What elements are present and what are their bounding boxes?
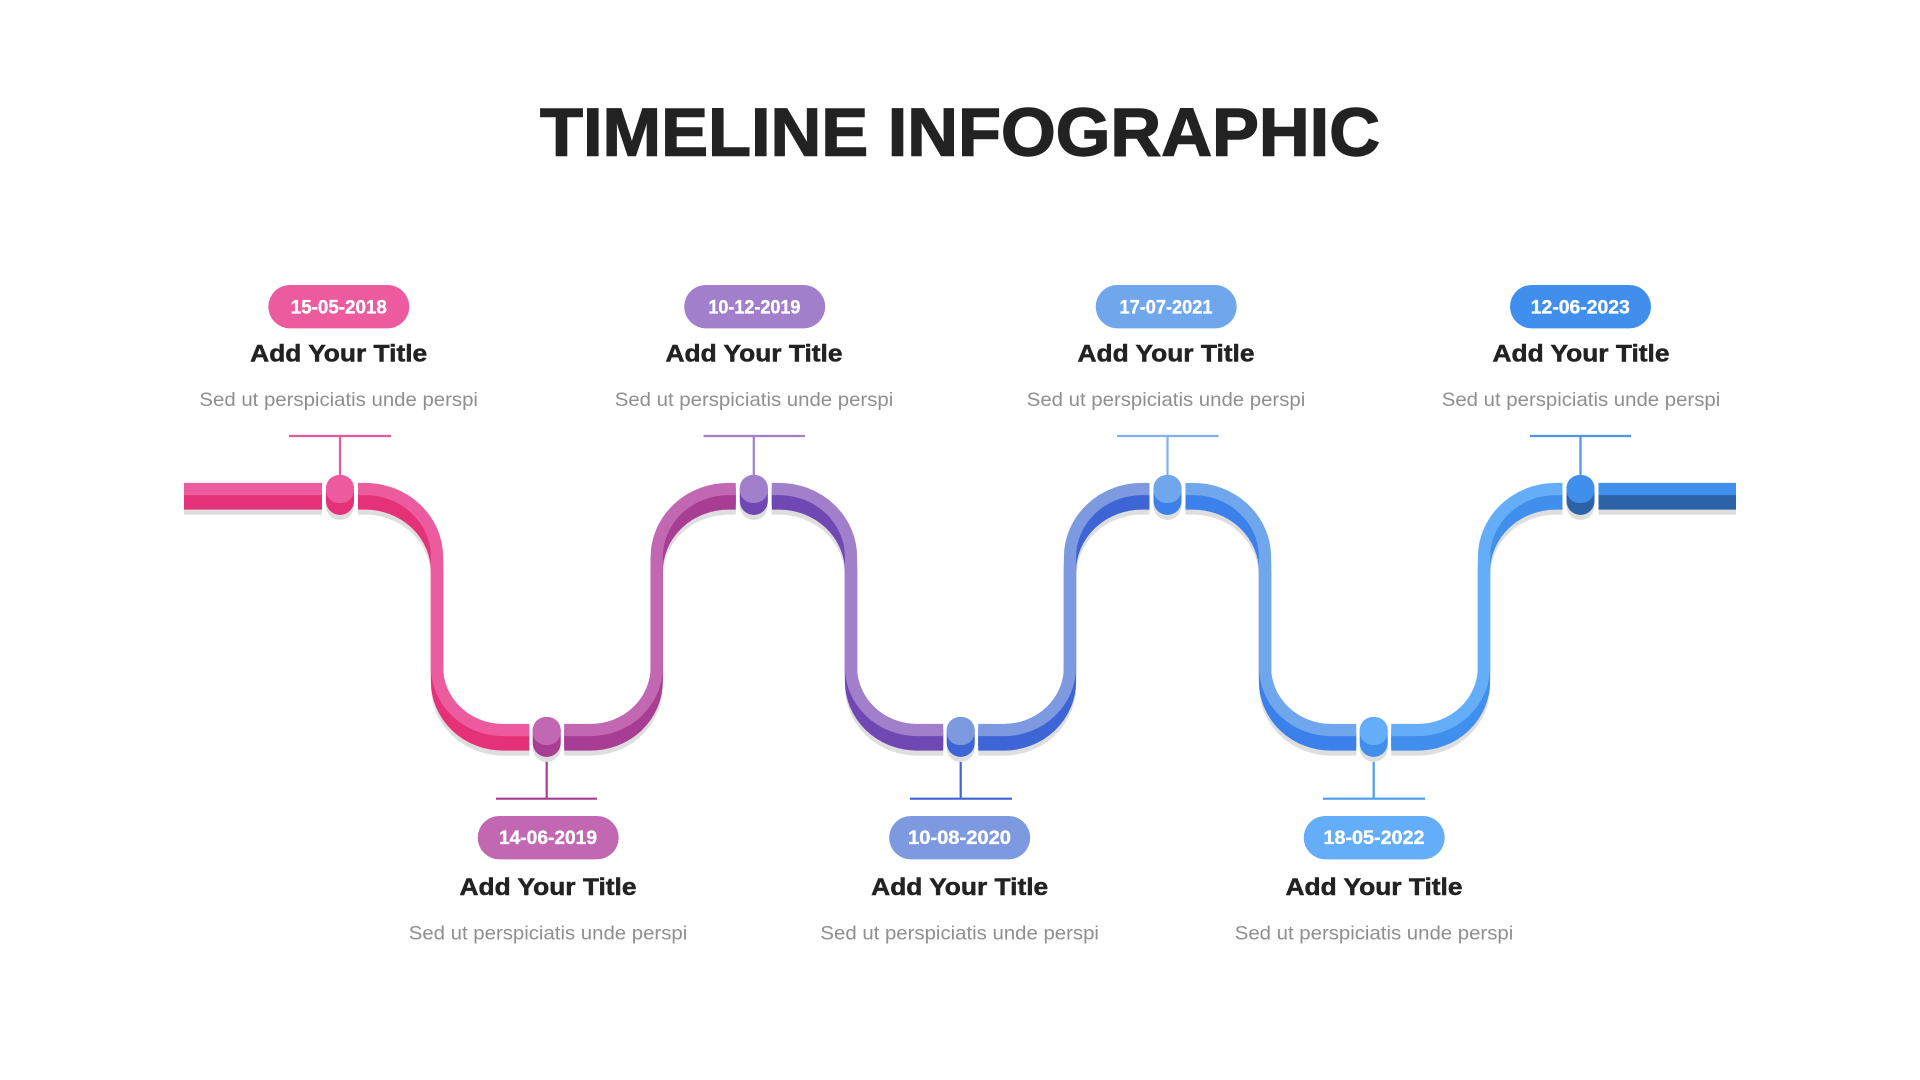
heading: Add Your Title [1492,341,1670,368]
date pill: 10-08-2020 [908,828,1011,849]
heading: Add Your Title [871,874,1048,901]
date pill: 17-07-2021 [1120,297,1213,318]
track segment: light blue curve [1391,489,1562,750]
heading: Add Your Title [1286,874,1462,901]
node [533,717,561,762]
date pill [1304,816,1445,859]
node [1360,717,1388,762]
track segment: left pink bar [184,489,322,508]
node [947,717,975,762]
date pill [1096,285,1237,328]
date pill: 10-12-2019 [708,297,800,318]
track segment: magenta curve [564,489,736,750]
milestone 3: 10-12-2019 [615,285,893,520]
track segment: periwinkle curve [978,489,1150,750]
milestone 7: 12-06-2023 [1442,285,1720,520]
date pill: 14-06-2019 [499,828,597,849]
connector T [1323,756,1425,799]
track segment: right blue bar [1598,489,1736,508]
milestone 6: 18-05-2022 [1235,717,1513,944]
title: TIMELINE INFOGRAPHIC [540,95,1380,171]
connector T [910,756,1012,799]
heading: Add Your Title [460,874,636,901]
date pill: 12-06-2023 [1531,297,1630,318]
connector T [289,436,391,476]
track segment: pink curve [358,489,529,750]
description: Sed ut perspiciatis unde perspi [409,922,687,944]
wavy timeline track [184,489,1736,750]
date pill [1510,285,1651,328]
connector T [704,436,805,476]
description: Sed ut perspiciatis unde perspi [1442,389,1720,411]
node [1154,475,1182,520]
date pill [268,285,409,328]
node [1566,475,1594,520]
date pill [889,816,1030,859]
heading: Add Your Title [666,341,842,368]
connector T [496,756,597,799]
connector T [1117,436,1218,476]
heading: Add Your Title [250,341,427,368]
date pill: 15-05-2018 [291,297,387,318]
description: Sed ut perspiciatis unde perspi [199,389,478,411]
track segment: blue curve [1186,489,1356,750]
track segment: purple curve [772,489,943,750]
description: Sed ut perspiciatis unde perspi [615,389,893,411]
description: Sed ut perspiciatis unde perspi [820,922,1099,944]
milestone 5: 17-07-2021 [1027,285,1305,520]
node [326,475,354,520]
node [740,475,768,520]
milestone 1: 15-05-2018 [199,285,478,520]
date pill [478,816,619,859]
connector T [1530,436,1631,476]
date pill [684,285,825,328]
date pill: 18-05-2022 [1324,828,1424,849]
milestone 4: 10-08-2020 [820,717,1099,944]
heading: Add Your Title [1078,341,1254,368]
description: Sed ut perspiciatis unde perspi [1235,922,1513,944]
milestone 2: 14-06-2019 [409,717,687,944]
description: Sed ut perspiciatis unde perspi [1027,389,1305,411]
